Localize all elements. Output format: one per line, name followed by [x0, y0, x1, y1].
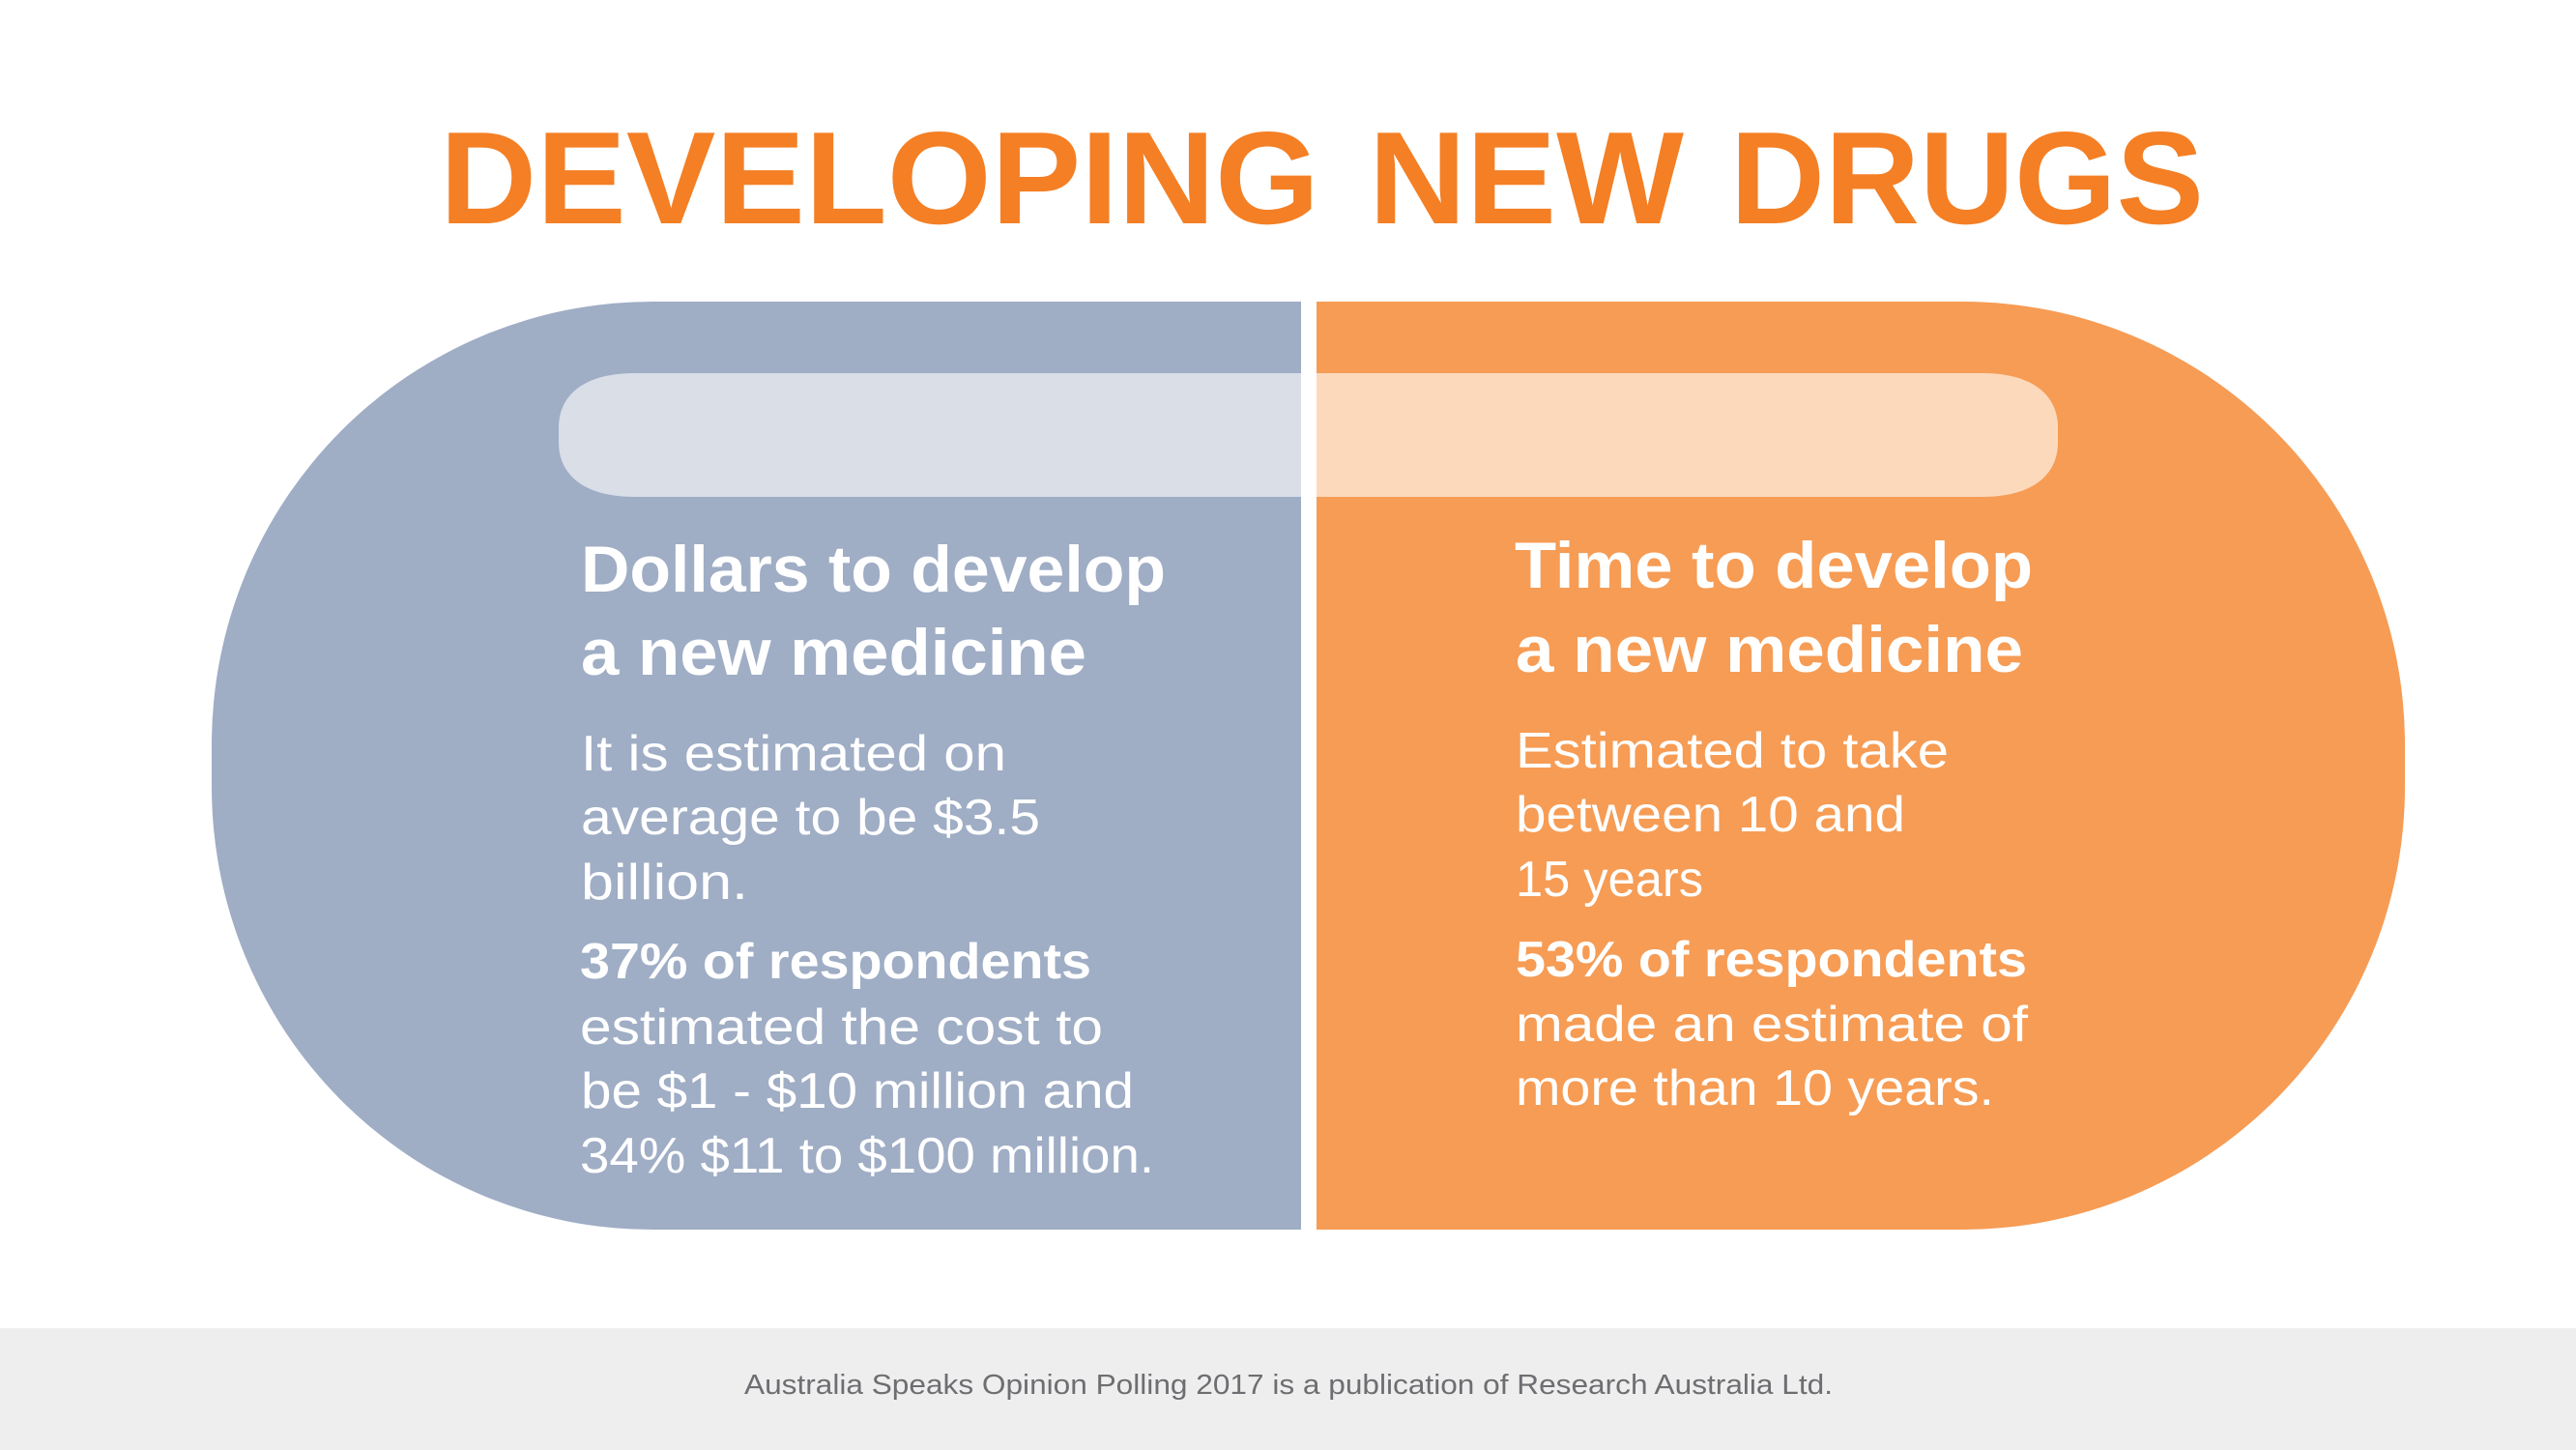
text: respondents cost estimate: estimated the cost to [580, 1000, 1103, 1056]
heading: dollars [581, 533, 1166, 689]
panel: dollars to develop (left capsule half) [212, 302, 1301, 1230]
text: time estimate: between 10 and [1516, 787, 1905, 843]
capsule right half [1317, 302, 2405, 1230]
heading: time: Time to develop [1515, 529, 2033, 602]
capsule highlight right [1317, 373, 2058, 497]
title: NEW [1369, 104, 1685, 251]
text: respondents cost estimate [580, 934, 1154, 1184]
capsule left half [212, 302, 1301, 1230]
text: respondents cost estimate: be $1 - $10 million and [581, 1063, 1134, 1119]
text: average estimate [581, 726, 1040, 911]
panel: time to develop (right capsule half) [1317, 302, 2405, 1230]
text: time estimate: Estimated to take [1516, 723, 1949, 779]
heading: dollars: Dollars to develop [581, 533, 1166, 606]
heading: time [1515, 529, 2033, 686]
heading: dollars: a new medicine [581, 616, 1086, 689]
capsule highlight left [559, 373, 1301, 497]
text: average estimate: average to be $3.5 [581, 790, 1040, 846]
title: DEVELOPING [440, 104, 1319, 251]
text: respondents cost estimate: 34% $11 to $100 million. [580, 1128, 1154, 1184]
title [440, 104, 2204, 251]
text: respondents time estimate [1516, 932, 2029, 1116]
footer [0, 1328, 2576, 1450]
text: respondents time estimate: 53% of respondents [1516, 932, 2027, 988]
footer text: Australia Speaks Opinion Polling 2017 is a publication of Research Australia Ltd. [744, 1370, 1833, 1401]
text: average estimate: billion. [581, 855, 748, 911]
text: time estimate [1516, 723, 1949, 908]
text: average estimate: It is estimated on [581, 726, 1006, 782]
text: time estimate: 15 years [1516, 852, 1703, 908]
title: DRUGS [1730, 104, 2204, 251]
text: respondents cost estimate: 37% of respondents [580, 934, 1091, 990]
text: respondents time estimate: more than 10 years. [1516, 1060, 1994, 1116]
text: respondents time estimate: made an estimate of [1516, 997, 2029, 1053]
heading: time: a new medicine [1516, 613, 2023, 686]
